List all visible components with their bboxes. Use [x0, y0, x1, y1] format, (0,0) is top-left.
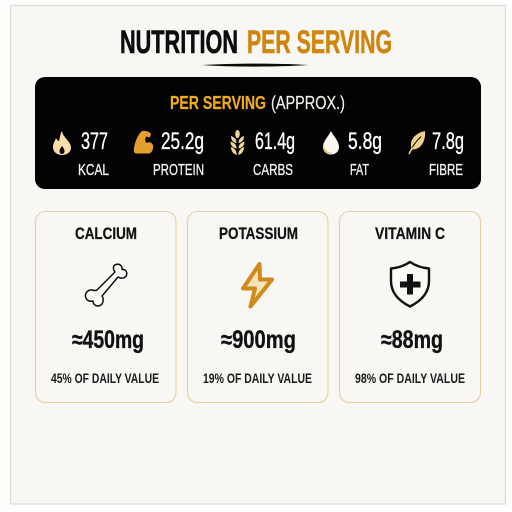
macro: calories: 377 [81, 128, 108, 155]
panel: calcium [36, 212, 176, 402]
icon: wheat [230, 130, 244, 155]
macro: fibre: FIBRE [429, 162, 463, 179]
title: PER SERVING [247, 24, 392, 60]
icon: flexed arm [134, 131, 153, 154]
icon: bone [85, 264, 127, 306]
macro: calories: KCAL [78, 162, 109, 179]
title: NUTRITION [120, 24, 238, 60]
macro: calories [53, 128, 109, 179]
panel: per serving macros [35, 77, 481, 189]
potassium heading: POTASSIUM [219, 224, 298, 243]
icon: flame [53, 131, 71, 155]
macro: fat: FAT [350, 162, 369, 179]
macro: fibre: 7.8g [432, 128, 464, 155]
panel: vitamin c [340, 212, 480, 402]
macro: fat: 5.8g [348, 128, 382, 155]
macro: fat [323, 128, 382, 179]
title underline brush stroke [202, 64, 308, 67]
vitamin c daily value: 98% OF DAILY VALUE [355, 371, 465, 386]
calcium heading: CALCIUM [75, 224, 137, 243]
title [120, 24, 392, 60]
macro: protein: 25.2g [161, 128, 204, 155]
icon: shield with cross [391, 262, 429, 306]
panel: potassium [188, 212, 328, 402]
calcium daily value: 45% OF DAILY VALUE [51, 371, 159, 386]
potassium daily value: 19% OF DAILY VALUE [203, 371, 312, 386]
macro: protein: PROTEIN [153, 162, 204, 179]
macro: fibre [409, 128, 464, 179]
macro: carbs [230, 128, 295, 179]
panel heading: PER SERVING [170, 93, 266, 113]
icon: leaf [411, 131, 425, 150]
icon: drop [323, 131, 339, 154]
potassium amount: ≈900mg [221, 326, 296, 354]
vitamin c amount: ≈88mg [381, 326, 443, 354]
calcium amount: ≈450mg [72, 326, 144, 354]
macro: carbs: CARBS [253, 162, 293, 179]
panel heading: (APPROX.) [271, 93, 345, 113]
macro: carbs: 61.4g [255, 128, 295, 155]
macro: protein [134, 128, 204, 179]
icon: lightning bolt [243, 264, 272, 306]
vitamin c heading: VITAMIN C [375, 224, 445, 243]
